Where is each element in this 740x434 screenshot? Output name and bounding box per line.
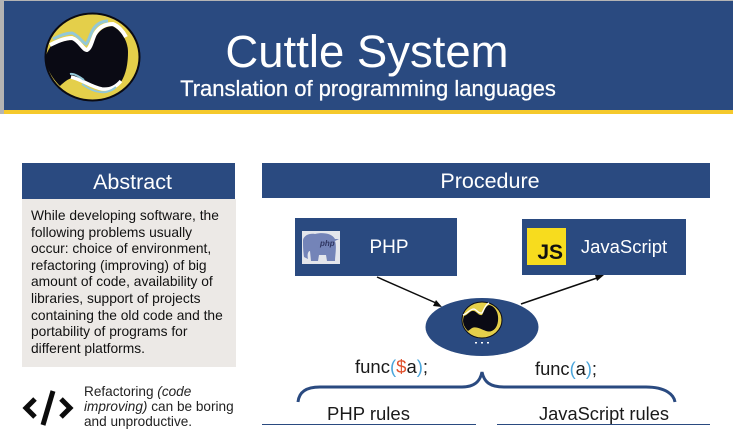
abstract body text: following problems usually xyxy=(31,225,192,240)
panel: abstract xyxy=(22,163,236,367)
abstract body text: amount of code, availability of xyxy=(31,274,213,289)
title: Cuttle System xyxy=(225,26,509,77)
code sample: PHP: func($a); xyxy=(355,356,428,377)
diagram connectors xyxy=(262,275,710,425)
arrow: Cuttle to JavaScript xyxy=(521,275,604,304)
abstract body text: libraries, support of projects xyxy=(31,291,200,306)
callout: refactoring xyxy=(22,384,234,429)
JavaScript rules underline xyxy=(497,424,710,426)
abstract heading xyxy=(22,163,235,199)
icon: cuttle logo xyxy=(44,12,140,102)
PHP box xyxy=(295,218,457,276)
abstract body text: While developing software, the xyxy=(31,208,219,223)
PHP rules heading: PHP rules xyxy=(327,403,410,424)
JavaScript box xyxy=(522,219,686,275)
PHP label: PHP xyxy=(369,237,409,258)
icon: JS badge xyxy=(527,228,566,265)
page frame top edge xyxy=(0,0,733,2)
arrow: PHP to Cuttle xyxy=(377,277,442,307)
code sample: JavaScript: func(a); xyxy=(535,358,597,379)
ellipsis marks xyxy=(475,342,489,344)
callout text: improving) can be boring xyxy=(84,399,234,414)
icon: PHP elephant: php xyxy=(319,239,335,248)
subtitle: Translation of programming languages xyxy=(180,76,556,101)
abstract body text: occur: choice of environment, xyxy=(31,241,211,256)
JavaScript rules heading: JavaScript rules xyxy=(539,403,669,424)
abstract body text: different platforms. xyxy=(31,341,145,356)
banner background xyxy=(4,1,733,114)
icon: PHP elephant xyxy=(302,231,340,264)
callout text: Refactoring (code xyxy=(84,384,191,399)
JavaScript label: JavaScript xyxy=(581,236,667,257)
abstract body text: refactoring (improving) of big xyxy=(31,258,207,273)
icon: code brackets xyxy=(22,390,74,426)
abstract body text: containing the old code and the xyxy=(31,308,223,323)
callout text xyxy=(84,384,234,429)
panel: procedure xyxy=(262,163,710,425)
PHP rules underline xyxy=(262,424,476,426)
Cuttle node xyxy=(426,298,538,356)
procedure heading: Procedure xyxy=(440,169,540,193)
page frame edge xyxy=(0,0,4,114)
icon: small cuttle logo xyxy=(462,302,502,338)
abstract body text xyxy=(22,199,236,367)
procedure heading xyxy=(262,163,710,198)
abstract body text: portability of programs for xyxy=(31,324,187,339)
header banner xyxy=(0,0,740,115)
brace xyxy=(298,372,675,402)
icon: JS badge: JS xyxy=(537,241,563,264)
callout text: and unproductive. xyxy=(84,414,192,429)
abstract heading: Abstract xyxy=(93,170,172,194)
